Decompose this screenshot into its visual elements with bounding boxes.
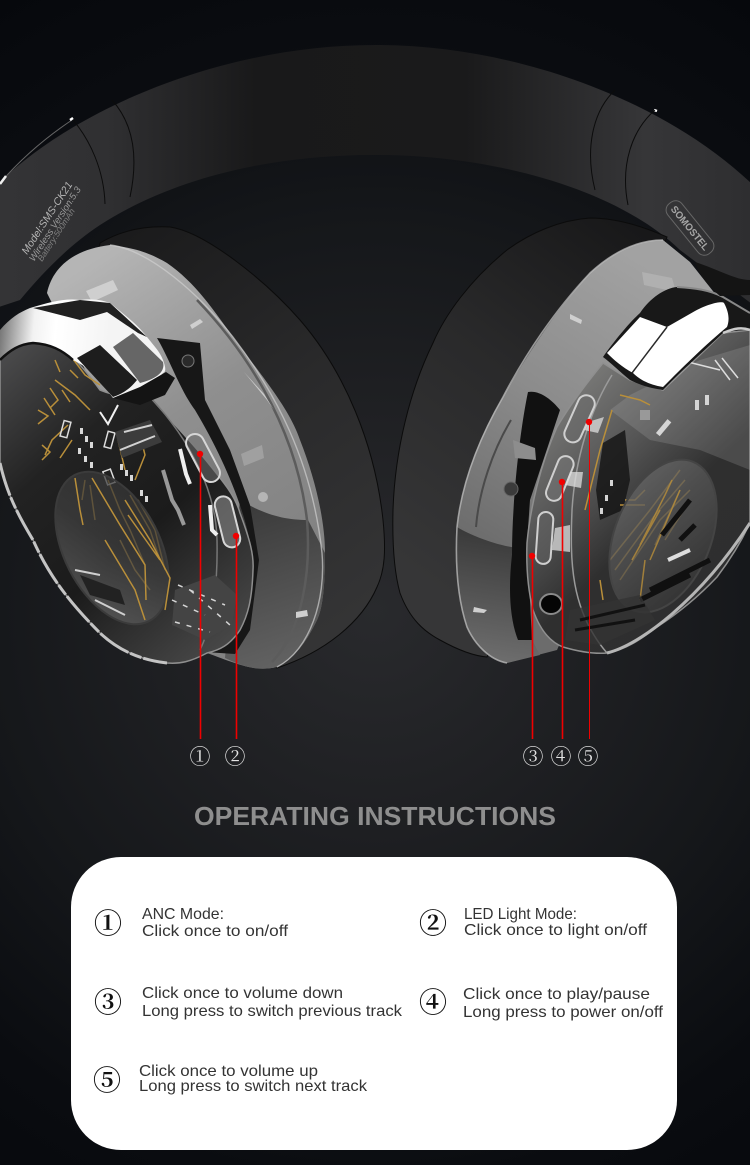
callout 3: [529, 553, 535, 739]
left lower components: [172, 575, 237, 640]
left button pills: [183, 431, 242, 549]
instruction 3: Long press to switch previous track: [142, 1003, 403, 1020]
right button pills: [535, 393, 597, 564]
callout 2: [233, 533, 239, 739]
instruction 1: [94, 902, 289, 942]
instruction 4: Click once to play/pause: [463, 986, 650, 1003]
left clear plate: [47, 245, 325, 669]
instruction 4: [419, 981, 664, 1021]
callout 5: [586, 419, 592, 739]
callout numbers: ⑤: [578, 741, 598, 771]
model text: Battery:500mAh: [35, 206, 77, 263]
right circuit traces: [585, 358, 738, 600]
right stud pins: [473, 272, 676, 613]
left disc traces: [75, 478, 170, 620]
left ear cup: [0, 227, 385, 669]
instruction 2: [419, 902, 648, 942]
right dark band: [510, 392, 560, 640]
right chrome yoke: [603, 262, 750, 390]
right cushion: [393, 218, 667, 657]
instruction 3: ③: [94, 981, 122, 1021]
left face with circuit board: [0, 343, 253, 663]
right lower components: [565, 595, 655, 645]
left inner disc: [32, 453, 192, 643]
instruction 4: Long press to power on/off: [463, 1004, 664, 1021]
instruction 1: ANC Mode:: [142, 906, 224, 923]
right inner disc: [589, 444, 737, 628]
left cushion: [90, 227, 385, 668]
instruction 3: Click once to volume down: [142, 985, 343, 1002]
headphone illustration: [0, 45, 750, 669]
left chrome yoke: [0, 299, 175, 424]
right ear cup: [393, 218, 750, 663]
right plate lower shadow: [456, 527, 540, 663]
callout numbers: ①: [190, 741, 210, 771]
instruction 5: ⑤: [93, 1059, 121, 1099]
instruction 5: Click once to volume up: [139, 1063, 318, 1080]
callout numbers: ④: [550, 741, 572, 771]
instruction 5: [93, 1059, 368, 1099]
left dark band: [157, 338, 259, 654]
headband: [0, 45, 750, 310]
brand badge: [663, 197, 717, 259]
left stud pins: [86, 280, 308, 618]
left plate lower shadow: [225, 500, 325, 669]
right clear plate: [456, 240, 720, 663]
callout numbers: ③: [522, 741, 544, 771]
instruction 1: Click once to on/off: [142, 923, 289, 940]
callout 4: [559, 479, 565, 739]
model text: Model:SMS-CK21: [19, 180, 75, 257]
callout numbers: ②: [224, 741, 246, 771]
callout 1: [197, 451, 203, 739]
instruction 1: ①: [94, 902, 122, 942]
brand badge: SOMOSTEL: [668, 204, 710, 253]
callout lines: [197, 419, 592, 739]
instruction 2: ②: [419, 902, 447, 942]
panel: instructions card: [71, 857, 677, 1150]
instruction 5: Long press to switch next track: [139, 1078, 368, 1095]
left circuit traces: [38, 355, 165, 590]
instruction 2: Click once to light on/off: [464, 922, 648, 939]
audio jack: [540, 594, 562, 614]
instruction 2: LED Light Mode:: [464, 906, 577, 923]
model text: Wireless Version:5.3: [27, 184, 84, 264]
right face with circuit board: [527, 330, 750, 653]
right disc parts: [632, 480, 710, 600]
instruction 4: ④: [419, 981, 447, 1021]
title: OPERATING INSTRUCTIONS: [194, 801, 556, 831]
callout numbers: [190, 741, 598, 771]
instruction 3: [94, 981, 403, 1021]
